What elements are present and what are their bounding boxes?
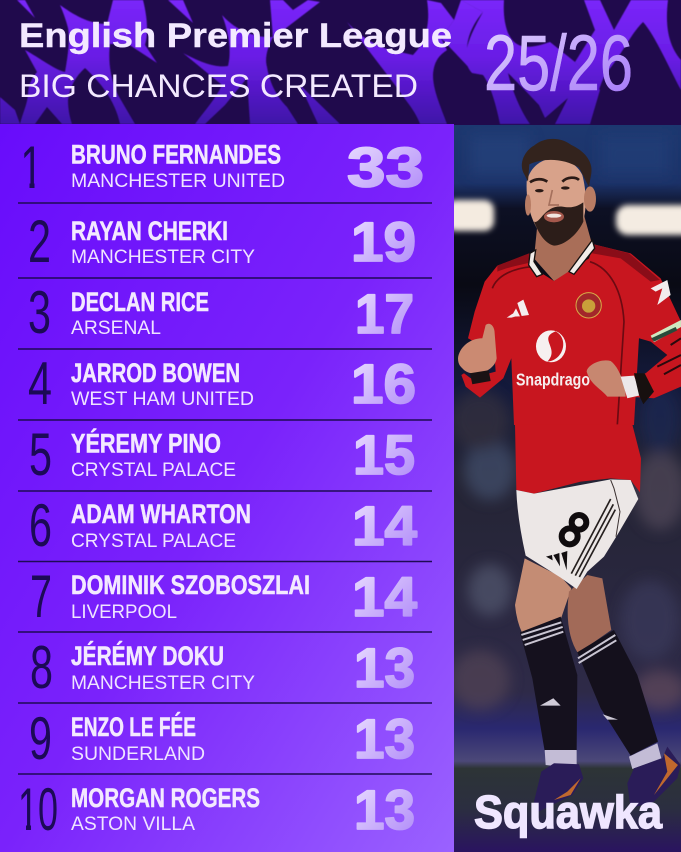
hair [522, 139, 592, 187]
row 5: Yéremy Pino [30, 428, 414, 476]
row 10: Morgan Rogers: 13 [354, 778, 415, 841]
right cuff [634, 373, 654, 404]
right sock [577, 630, 658, 756]
sock tops [545, 743, 661, 769]
photo panel: stadium background [446, 125, 681, 852]
row 8: Jérémy Doku: 8 [30, 634, 53, 701]
row 2: Rayan Cherki: RAYAN CHERKI [71, 216, 228, 246]
row 3: Declan Rice: ARSENAL [71, 317, 161, 339]
row 8: Jérémy Doku: MANCHESTER CITY [71, 672, 255, 694]
left hand [458, 324, 497, 374]
shorts logo [546, 551, 567, 570]
row 6: Adam Wharton: CRYSTAL PALACE [71, 530, 236, 552]
beard [534, 202, 583, 246]
row 5: Yéremy Pino: 5 [29, 421, 52, 488]
captain armband [651, 320, 681, 342]
sponsor symbol [536, 330, 566, 362]
row 5: Yéremy Pino: CRYSTAL PALACE [71, 459, 236, 481]
row 2: Rayan Cherki [30, 220, 415, 263]
right thigh [568, 575, 611, 653]
row 1: Bruno Fernandes: 33 [347, 136, 424, 198]
row 8: Jérémy Doku: JÉRÉMY DOKU [71, 640, 224, 671]
row 4: Jarrod Bowen: 16 [351, 352, 416, 415]
row 1: Bruno Fernandes: 1 [20, 134, 42, 201]
row 9: Enzo Le Fée: 13 [354, 707, 415, 770]
row 4: Jarrod Bowen: WEST HAM UNITED [71, 388, 254, 410]
season label: 25/26 [484, 18, 633, 107]
row 3: Declan Rice: 17 [355, 282, 414, 345]
player: lower body [515, 424, 681, 812]
row 5: Yéremy Pino: YÉREMY PINO [71, 428, 221, 458]
left cuff [470, 370, 491, 384]
eyes and brows [530, 178, 579, 182]
row 3: Declan Rice [30, 290, 412, 334]
shorts stripes [571, 499, 615, 577]
sleeve stripes [657, 338, 681, 374]
shirt hem [515, 424, 641, 494]
row 6: Adam Wharton: 14 [352, 494, 417, 557]
collar [529, 240, 595, 277]
row 2: Rayan Cherki: 19 [351, 210, 416, 273]
row 7: Dominik Szoboszlai: 14 [352, 565, 417, 628]
row 4: Jarrod Bowen [29, 362, 415, 405]
row 5: Yéremy Pino: 15 [353, 423, 415, 486]
subtitle: BIG CHANCES CREATED [19, 68, 418, 104]
row 9: Enzo Le Fée: SUNDERLAND [71, 743, 205, 765]
sponsor wordmark: Snapdrago [516, 370, 590, 390]
row 1: Bruno Fernandes: BRUNO FERNANDES [71, 140, 281, 170]
shirt torso and arms [461, 244, 681, 425]
title: English Premier League [19, 17, 452, 55]
row 6: Adam Wharton: ADAM WHARTON [71, 499, 251, 529]
row 1: Bruno Fernandes: MANCHESTER UNITED [71, 170, 285, 192]
row 4: Jarrod Bowen: 4 [28, 350, 52, 417]
face [527, 158, 586, 243]
logo: Squawka: Squawka [474, 786, 662, 838]
row 3: Declan Rice: DECLAN RICE [71, 287, 209, 317]
shorts number 8 [562, 515, 586, 544]
row 8: Jérémy Doku: 13 [354, 636, 415, 699]
sock logos [540, 698, 618, 720]
row 1: Bruno Fernandes [24, 144, 423, 188]
row 7: Dominik Szoboszlai [32, 575, 418, 618]
left sock [520, 617, 577, 751]
wrist tape [621, 376, 641, 398]
row 7: Dominik Szoboszlai: DOMINIK SZOBOSZLAI [71, 570, 310, 600]
row 10: Morgan Rogers [21, 788, 414, 830]
row 10: Morgan Rogers: ASTON VILLA [71, 813, 195, 835]
boots [534, 763, 583, 812]
sleeve logo [651, 280, 671, 305]
panel: ranking table [0, 124, 454, 852]
shorts [516, 479, 638, 589]
neck [534, 215, 591, 281]
row 4: Jarrod Bowen: JARROD BOWEN [71, 358, 240, 388]
row 8: Jérémy Doku [32, 640, 414, 689]
row 7: Dominik Szoboszlai: LIVERPOOL [71, 601, 177, 623]
row 2: Rayan Cherki: MANCHESTER CITY [71, 246, 255, 268]
row 9: Enzo Le Fée: 9 [29, 705, 52, 772]
row 3: Declan Rice: 3 [28, 279, 51, 346]
row 6: Adam Wharton [31, 504, 418, 547]
club crest [576, 293, 601, 318]
row 7: Dominik Szoboszlai: 7 [30, 563, 52, 630]
row 10: Morgan Rogers: 10 [18, 776, 58, 843]
row 2: Rayan Cherki: 2 [28, 208, 51, 275]
adidas logo [507, 300, 529, 318]
left thigh [515, 558, 571, 633]
right hand [587, 360, 626, 397]
row 10: Morgan Rogers: MORGAN ROGERS [71, 783, 260, 813]
header band with flame pattern [0, 0, 681, 124]
row 9: Enzo Le Fée: ENZO LE FÉE [71, 711, 196, 742]
row 6: Adam Wharton: 6 [29, 492, 52, 559]
row 9: Enzo Le Fée [30, 712, 414, 760]
mouth [544, 211, 564, 222]
sock stripes [521, 622, 616, 663]
player: upper body [458, 139, 681, 425]
